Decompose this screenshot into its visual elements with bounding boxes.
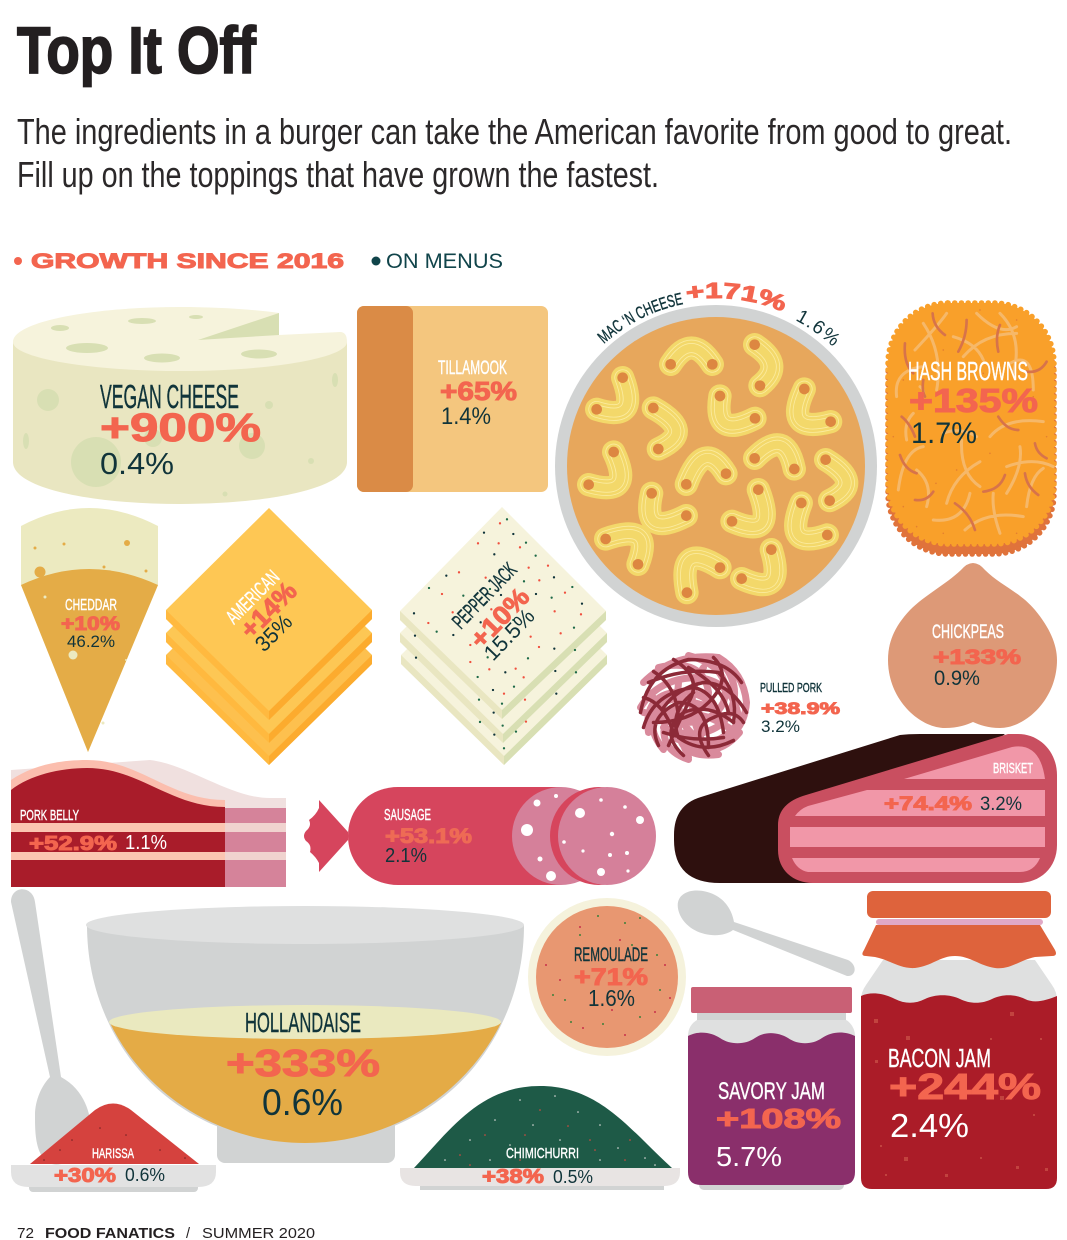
remoulade label xyxy=(574,945,648,1011)
pulled pork label xyxy=(760,680,840,736)
savory jam label xyxy=(716,1078,841,1172)
sausage label: SAUSAGE xyxy=(384,807,431,824)
panel: vegan cheese xyxy=(13,307,347,504)
panel: mac 'n cheese xyxy=(555,282,877,627)
hash brown shreds xyxy=(893,310,1053,533)
pepper jack label xyxy=(448,559,540,665)
vegan cheese label: VEGAN CHEESE xyxy=(100,378,239,415)
chimichurri label: CHIMICHURRI xyxy=(506,1145,579,1162)
pulled pork label: +38.9% xyxy=(761,699,840,718)
pepper specks xyxy=(414,519,582,748)
bacon jam label: BACON JAM xyxy=(888,1043,991,1073)
vegan cheese label: 0.4% xyxy=(100,446,174,481)
legend: GROWTH SINCE 2016 xyxy=(31,250,344,273)
remoulade label: 1.6% xyxy=(588,985,635,1011)
hash browns label xyxy=(908,356,1038,450)
tillamook label: TILLAMOOK xyxy=(438,358,507,379)
savory jam label: +108% xyxy=(716,1103,841,1134)
chickpeas label: CHICKPEAS xyxy=(932,622,1004,643)
savory jam label: SAVORY JAM xyxy=(718,1078,825,1105)
brisket label xyxy=(884,760,1033,815)
harissa label xyxy=(54,1145,165,1187)
hollandaise label xyxy=(226,1007,380,1123)
chimichurri label: 0.5% xyxy=(553,1167,593,1187)
icon: spoon left xyxy=(11,889,91,1165)
bacon jam label: +244% xyxy=(889,1066,1041,1107)
panel: pepper jack xyxy=(400,507,607,765)
panel: savory jam xyxy=(688,987,855,1190)
vegan cheese label: +900% xyxy=(100,406,261,450)
tillamook label: +65% xyxy=(440,376,517,406)
subtitle: Fill up on the toppings that have grown the fastest. xyxy=(17,154,659,195)
pepper jack label: PEPPER JACK xyxy=(448,559,522,633)
panel: pulled pork xyxy=(640,656,840,760)
mac 'n cheese curved label xyxy=(596,282,840,346)
panel: cheddar xyxy=(21,508,158,752)
pulled pork ball xyxy=(640,656,746,760)
panel: chimichurri xyxy=(400,1086,680,1190)
mac 'n cheese curved label: +171% xyxy=(686,282,785,311)
hollandaise label: HOLLANDAISE xyxy=(245,1007,361,1038)
panel: bacon jam xyxy=(861,891,1057,1189)
pepper jack label: 15.5% xyxy=(479,604,540,665)
tillamook label: 1.4% xyxy=(441,403,491,430)
pork belly label: +52.9% xyxy=(29,833,117,855)
american label: 35% xyxy=(250,609,297,657)
pork belly label: 1.1% xyxy=(125,832,167,854)
bacon jam label xyxy=(888,1043,1041,1144)
brisket label: +74.4% xyxy=(884,794,972,815)
subtitle xyxy=(17,111,1012,195)
chimichurri label xyxy=(482,1145,593,1188)
hollandaise label: +333% xyxy=(226,1043,380,1085)
macaroni pieces xyxy=(583,339,847,598)
cheddar label xyxy=(61,597,120,651)
sausage label: 2.1% xyxy=(385,845,427,867)
panel: harissa xyxy=(11,1104,216,1192)
panel: hash browns xyxy=(888,303,1054,554)
footer xyxy=(17,1226,315,1240)
tillamook label xyxy=(438,358,517,430)
harissa label: 0.6% xyxy=(125,1165,165,1185)
legend: ON MENUS xyxy=(386,250,503,273)
savory jam label: 5.7% xyxy=(716,1141,782,1172)
panel: american xyxy=(166,508,372,765)
american label xyxy=(222,566,303,657)
cheddar label: CHEDDAR xyxy=(65,597,117,614)
pepper jack label: +10% xyxy=(464,582,535,654)
mac 'n cheese curved label: 1.6% xyxy=(796,310,840,346)
panel: remoulade xyxy=(528,898,686,1056)
vegan cheese label xyxy=(100,378,261,481)
chickpeas label: +133% xyxy=(933,646,1021,669)
remoulade label: +71% xyxy=(574,964,648,991)
bowl xyxy=(86,906,524,1163)
cheddar label: +10% xyxy=(61,614,120,635)
sausage label: +53.1% xyxy=(385,825,472,848)
chimichurri label: +38% xyxy=(482,1166,544,1188)
panel: pork belly xyxy=(11,760,286,887)
remoulade label: REMOULADE xyxy=(574,945,648,966)
pulled pork label: PULLED PORK xyxy=(760,680,822,695)
bacon jam label: 2.4% xyxy=(890,1107,969,1144)
hash browns label: +135% xyxy=(909,382,1038,419)
american label: AMERICAN xyxy=(222,566,284,629)
panel: hollandaise xyxy=(86,906,524,1163)
hash browns label: 1.7% xyxy=(911,417,977,450)
chickpeas label xyxy=(932,622,1021,690)
cheddar label: 46.2% xyxy=(67,632,115,651)
brisket label: 3.2% xyxy=(980,794,1022,815)
hollandaise label: 0.6% xyxy=(262,1082,343,1123)
harissa label: +30% xyxy=(54,1165,116,1187)
brisket label: BRISKET xyxy=(993,760,1033,777)
panel: brisket xyxy=(674,734,1057,883)
panel: chickpeas xyxy=(888,563,1057,728)
mac 'n cheese curved label: MAC ‘N CHEESE xyxy=(596,292,684,344)
title: Top It Off xyxy=(17,13,257,87)
pork belly label xyxy=(20,807,167,855)
chickpeas label: 0.9% xyxy=(934,667,980,690)
pulled pork label: 3.2% xyxy=(761,717,800,736)
legend xyxy=(14,250,503,273)
panel: sausage xyxy=(304,787,656,885)
icon: spoon right xyxy=(678,891,855,976)
pork belly label: PORK BELLY xyxy=(20,807,79,824)
panel: tillamook xyxy=(357,306,548,492)
sausage label xyxy=(384,807,472,867)
harissa label: HARISSA xyxy=(92,1145,134,1161)
american label: +14% xyxy=(234,576,303,644)
